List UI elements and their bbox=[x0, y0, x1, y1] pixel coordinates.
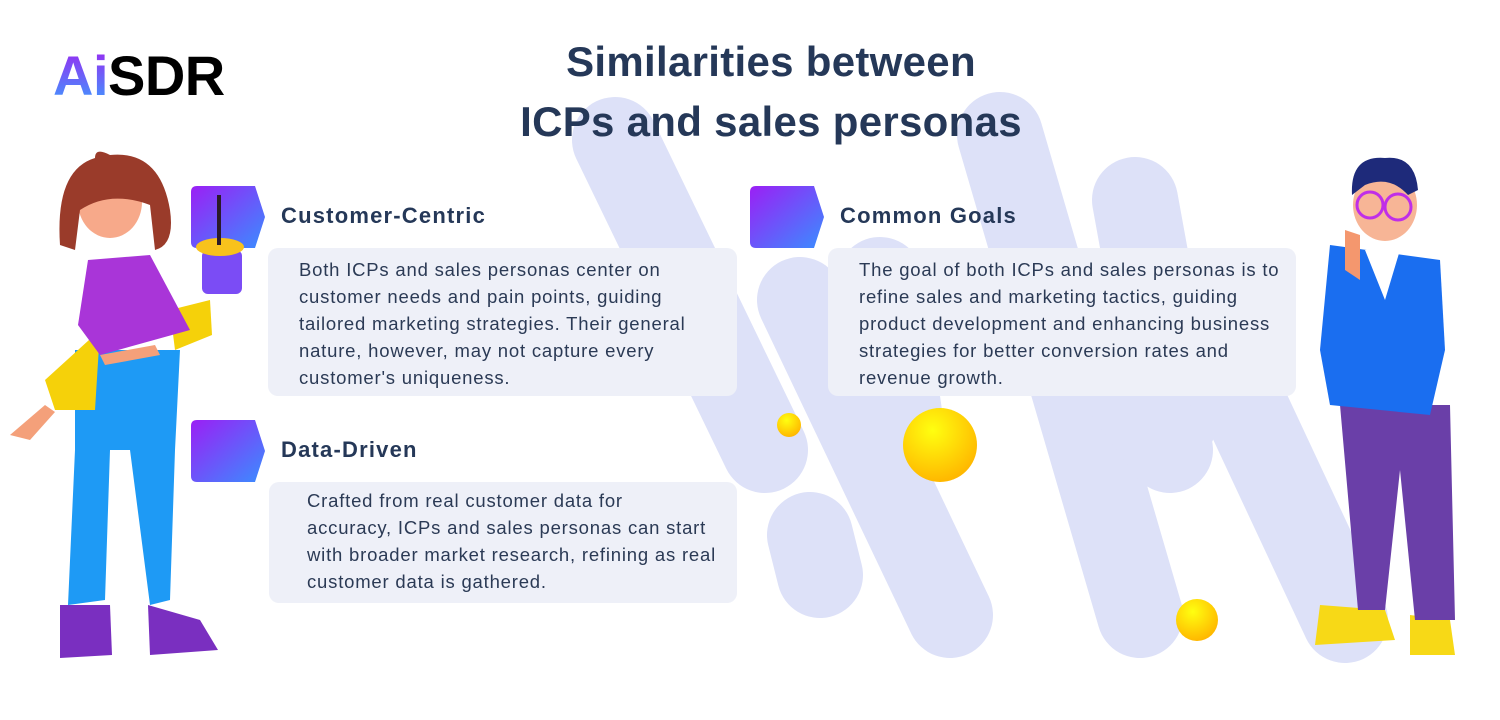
card: data-driven: Crafted from real customer data for bbox=[307, 490, 623, 511]
card: common goals: strategies for better conversion rates and bbox=[859, 340, 1229, 361]
title: Similarities between bbox=[566, 38, 976, 85]
card: customer-centric bbox=[268, 248, 737, 396]
heading: common goals: Common Goals bbox=[840, 203, 1017, 228]
card: common goals: product development and enhancing business bbox=[859, 313, 1270, 334]
title bbox=[520, 38, 1022, 145]
card: common goals: The goal of both ICPs and sales personas is to bbox=[859, 259, 1279, 280]
card: common goals: refine sales and marketing tactics, guiding bbox=[859, 286, 1238, 307]
logo: AiSDR bbox=[53, 44, 225, 107]
card: data-driven bbox=[269, 482, 737, 603]
icon: badge common goals bbox=[750, 186, 824, 248]
card: customer-centric: Both ICPs and sales personas center on bbox=[299, 259, 661, 280]
card: data-driven: with broader market research, refining as real bbox=[307, 544, 716, 565]
icon: badge customer-centric bbox=[191, 186, 265, 248]
card: customer-centric: customer needs and pain points, guiding bbox=[299, 286, 662, 307]
card: common goals: revenue growth. bbox=[859, 367, 1004, 388]
icon: badge data-driven bbox=[191, 420, 265, 482]
heading: customer-centric: Customer-Centric bbox=[281, 203, 486, 228]
illustration: man bbox=[1315, 158, 1455, 655]
card: customer-centric: nature, however, may not capture every bbox=[299, 340, 654, 361]
title: ICPs and sales personas bbox=[520, 98, 1022, 145]
card: data-driven: customer data is gathered. bbox=[307, 571, 547, 592]
card: data-driven: accuracy, ICPs and sales personas can start bbox=[307, 517, 706, 538]
card: customer-centric: tailored marketing strategies. Their general bbox=[299, 313, 686, 334]
card: common goals bbox=[828, 248, 1296, 396]
heading: data-driven: Data-Driven bbox=[281, 437, 418, 462]
card: customer-centric: customer's uniqueness. bbox=[299, 367, 510, 388]
illustration: woman bbox=[10, 152, 244, 658]
